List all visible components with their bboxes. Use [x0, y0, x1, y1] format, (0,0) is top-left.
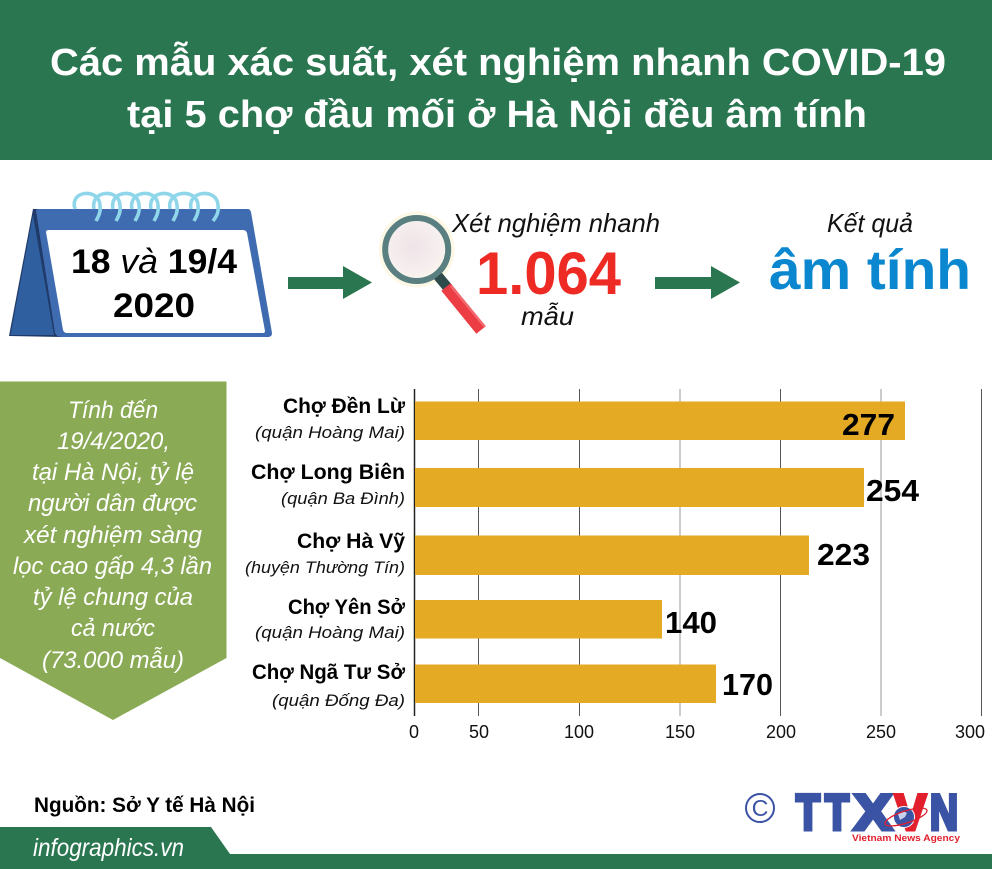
district labels: (huyện Thường Tín) [245, 559, 405, 577]
text: result [769, 208, 971, 301]
value labels: 140 [665, 605, 717, 640]
panel: national comparison callout: người dân được [28, 490, 197, 517]
district labels [245, 424, 405, 710]
market labels: Chợ Đền Lừ [283, 395, 406, 418]
panel: national comparison callout: (73.000 mẫu) [42, 646, 184, 674]
header banner [0, 0, 992, 160]
district labels: (quận Hoàng Mai) [255, 424, 405, 442]
value labels: 170 [722, 667, 773, 702]
district labels: (quận Đống Đa) [272, 692, 405, 710]
panel: national comparison callout: tại Hà Nội, tỷ lệ [32, 459, 194, 486]
logo: TTXVN: Vietnam News Agency [852, 833, 961, 844]
text: rapid tests: Xét nghiệm nhanh [451, 208, 660, 238]
district labels: (quận Hoàng Mai) [255, 624, 405, 642]
district labels: (quận Ba Đình) [281, 490, 405, 508]
text: result: Kết quả [827, 208, 913, 238]
title: Các mẫu xác suất, xét nghiệm nhanh COVID-19 [50, 40, 946, 84]
panel: national comparison callout: 19/4/2020, [57, 428, 170, 455]
market labels: Chợ Ngã Tư Sở [252, 661, 405, 684]
market labels [251, 395, 406, 684]
text: rapid tests [451, 208, 660, 331]
axis labels: 250 [866, 722, 896, 742]
logo: TTXVN [796, 784, 961, 844]
axis labels [409, 722, 985, 742]
logo: TTXVN: T [825, 784, 849, 840]
value labels: 254 [866, 473, 920, 508]
title: tại 5 chợ đầu mối ở Hà Nội đều âm tính [127, 94, 867, 136]
value labels [665, 407, 920, 702]
footer band [0, 827, 992, 869]
market labels: Chợ Long Biên [251, 461, 405, 484]
text: rapid tests: 1.064 [476, 240, 622, 307]
bar chart: samples per market [245, 389, 985, 742]
value labels: 223 [817, 537, 870, 572]
copyright symbol [746, 794, 774, 822]
axis labels: 0 [409, 722, 419, 742]
logo globe [883, 804, 929, 830]
arrow: test to result [655, 266, 740, 299]
text: rapid tests: mẫu [521, 301, 574, 331]
axis labels: 100 [564, 722, 594, 742]
calendar date: 18 và 19/4 [71, 243, 237, 281]
footer site name: infographics.vn [33, 834, 184, 862]
logo: TTXVN: T [796, 784, 820, 840]
calendar date: 2020 [113, 287, 195, 325]
panel: national comparison callout: tỷ lệ chung của [33, 584, 193, 611]
panel: national comparison callout: cả nước [71, 615, 155, 642]
icon: desk calendar [9, 193, 272, 337]
market labels: Chợ Hà Vỹ [297, 530, 405, 553]
logo: TTXVN: V [895, 784, 927, 840]
logo: TTXVN: N [930, 784, 958, 840]
panel: national comparison callout: Tính đến [68, 397, 158, 424]
axis labels: 50 [469, 722, 489, 742]
source: Nguồn: Sở Y tế Hà Nội [34, 794, 255, 817]
market labels: Chợ Yên Sở [288, 596, 405, 619]
title [50, 40, 946, 136]
calendar rings [74, 193, 218, 221]
axis labels: 150 [665, 722, 695, 742]
logo: TTXVN: X [854, 784, 892, 840]
text: result: âm tính [769, 238, 971, 301]
panel: national comparison callout: lọc cao gấp 4,3 lần [13, 553, 212, 580]
arrow: calendar to test [288, 266, 372, 299]
copyright symbol: C [752, 795, 768, 821]
panel: national comparison callout [0, 382, 226, 720]
axis labels: 200 [766, 722, 796, 742]
calendar date [71, 243, 237, 325]
value labels: 277 [842, 407, 895, 442]
axis labels: 300 [955, 722, 985, 742]
panel: national comparison callout: xét nghiệm sàng [23, 522, 203, 549]
icon: magnifying glass [379, 212, 485, 330]
bars [415, 402, 905, 703]
